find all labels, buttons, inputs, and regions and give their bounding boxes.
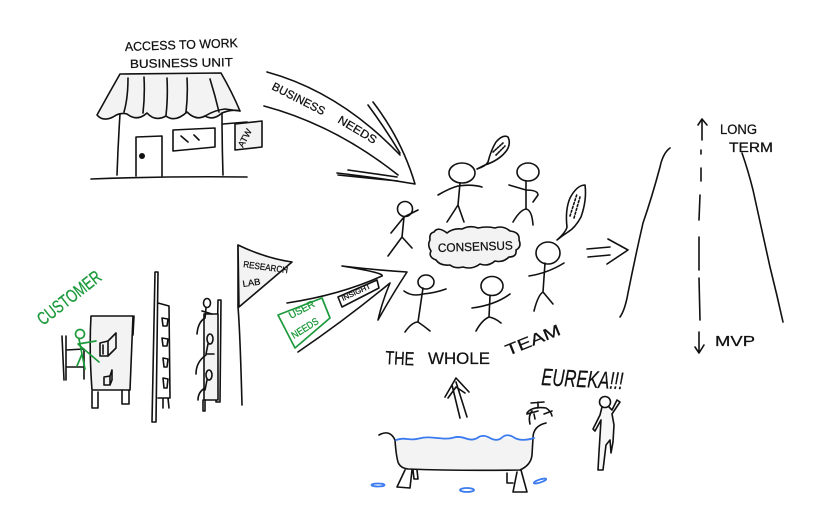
icon: tap [527,402,552,424]
figure: team member top right [509,163,539,225]
icon: research lab flag: RESEARCH [243,259,289,275]
icon: bathtub [372,402,552,492]
icon: research lab flag: LAB [242,277,261,289]
heading: the whole team [385,322,563,371]
callout: eureka: EUREKA!!! [541,364,624,395]
road edges [620,148,783,322]
arrow: up to long term [698,119,707,140]
panel: research lab [33,245,292,422]
label: user needs: NEEDS [290,316,321,342]
label: long term [720,122,773,155]
label: long term: TERM [729,140,773,155]
figure: team member bottom centre [472,276,510,331]
panel: the whole team [385,136,586,371]
figure: team member with speech bubble right [529,185,586,311]
label: user needs [278,298,330,348]
icon: water puddles [372,478,547,492]
heading: the whole team: TEAM [503,322,563,360]
water line [396,435,534,440]
icon: customer booth [62,316,134,408]
heading: the whole team: WHOLE [428,349,490,368]
label: long term: LONG [720,122,757,137]
panel: business unit shop [91,36,262,179]
label: user needs: USER [287,299,317,322]
icon: research lab flag [238,245,292,405]
heading: access to work business unit [125,36,239,71]
callout: consensus cloud: CONSENSUS [438,238,513,255]
figure: team member with racket speech bubble [438,136,509,222]
icon: shop building [91,113,247,179]
icon: customer figure [76,330,99,369]
panel: roadmap road [620,119,783,353]
arrow: insight to team [278,266,407,352]
heading: the whole team: THE [385,348,415,371]
arrow: business needs [264,72,415,184]
road centre line [699,150,701,320]
label: business needs [270,81,379,147]
arrow: down to mvp [695,332,704,353]
icon: person leaving bath [593,396,620,470]
icon: wall panel with notes [152,272,170,422]
heading: access to work business unit: BUSINESS UNIT [130,55,234,71]
callout: consensus cloud [429,227,520,268]
label: business needs: BUSINESS [270,81,327,118]
icon: ATW sign [235,121,262,150]
label: mvp: MVP [715,334,755,350]
figure: team member bottom left [404,275,446,332]
figure: team member left [388,202,418,256]
label: business needs: NEEDS [335,114,379,147]
label: insight: INSIGHT [341,283,373,303]
icon: observers behind panel [196,298,221,411]
heading: access to work business unit: ACCESS TO WORK [125,36,239,54]
icon: shop awning [97,73,240,119]
arrow: bath to team [445,378,469,418]
arrow: team to roadmap [587,239,628,264]
label: customer: CUSTOMER [33,267,105,329]
icon: ATW sign: ATW [236,127,254,149]
